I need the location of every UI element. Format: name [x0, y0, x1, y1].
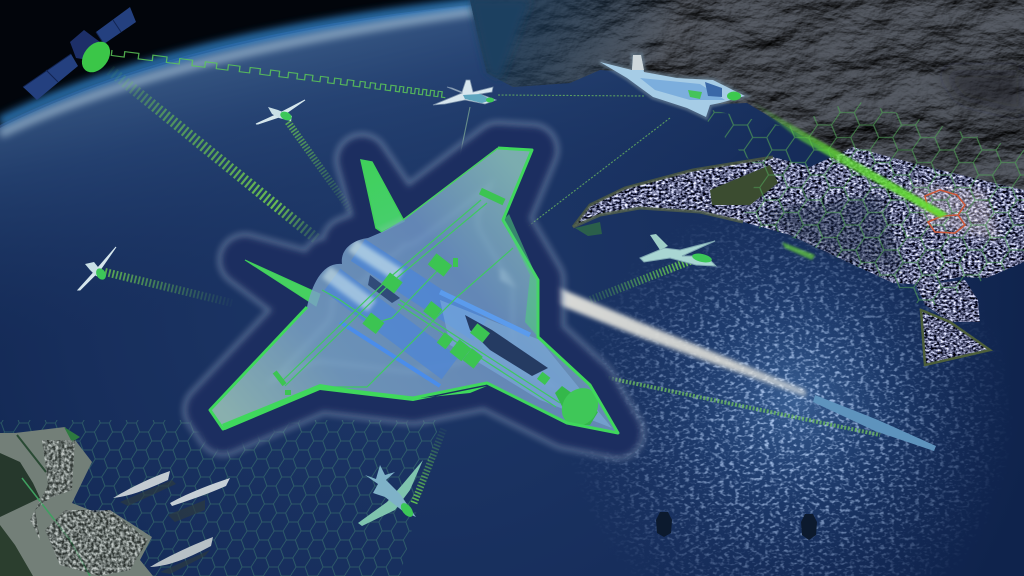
data beam: right drone — [590, 261, 690, 300]
threat zone: red hexagons — [925, 190, 965, 233]
space and earth limb — [0, 0, 800, 360]
systems wiring — [281, 200, 560, 407]
small green beam on island — [782, 242, 815, 260]
mountainous terrain, top right — [470, 0, 1024, 250]
coastal city and islands — [573, 147, 1024, 365]
port and naval base, bottom left — [0, 427, 153, 576]
engines and fuselage — [326, 245, 612, 428]
large escort jet, top centre-right — [600, 55, 745, 117]
missile smoke trail — [500, 268, 806, 397]
drone, right — [640, 234, 716, 266]
data beam: satellite to main aircraft — [110, 70, 318, 240]
glow halo around main aircraft — [210, 148, 618, 433]
data beam: lower drone — [414, 428, 444, 503]
data beam: left drone — [105, 272, 232, 303]
data beam: upper drone — [288, 122, 352, 212]
missile — [813, 395, 936, 451]
naval ships — [113, 471, 230, 574]
submarines — [656, 512, 817, 540]
green modules — [273, 188, 550, 395]
sunlit water on the right — [582, 220, 1003, 576]
drone, upper left — [256, 100, 305, 124]
thin data links between aircraft — [454, 95, 880, 435]
tail fin upper — [361, 160, 404, 232]
satellite — [23, 7, 136, 100]
tail fin left — [245, 260, 320, 306]
main aircraft — [210, 148, 618, 433]
data link: square wave from satellite — [111, 50, 446, 98]
escort jet, top centre — [433, 80, 496, 105]
airframe edge — [210, 148, 618, 433]
nose radar — [554, 381, 606, 433]
hexagon grid over terrain and city — [690, 100, 1024, 310]
laser beam to target — [752, 102, 948, 218]
hexagon grid over bottom-left sea — [0, 420, 440, 576]
airframe — [210, 148, 618, 433]
drone, bottom — [358, 460, 423, 526]
drone, left — [78, 247, 116, 290]
